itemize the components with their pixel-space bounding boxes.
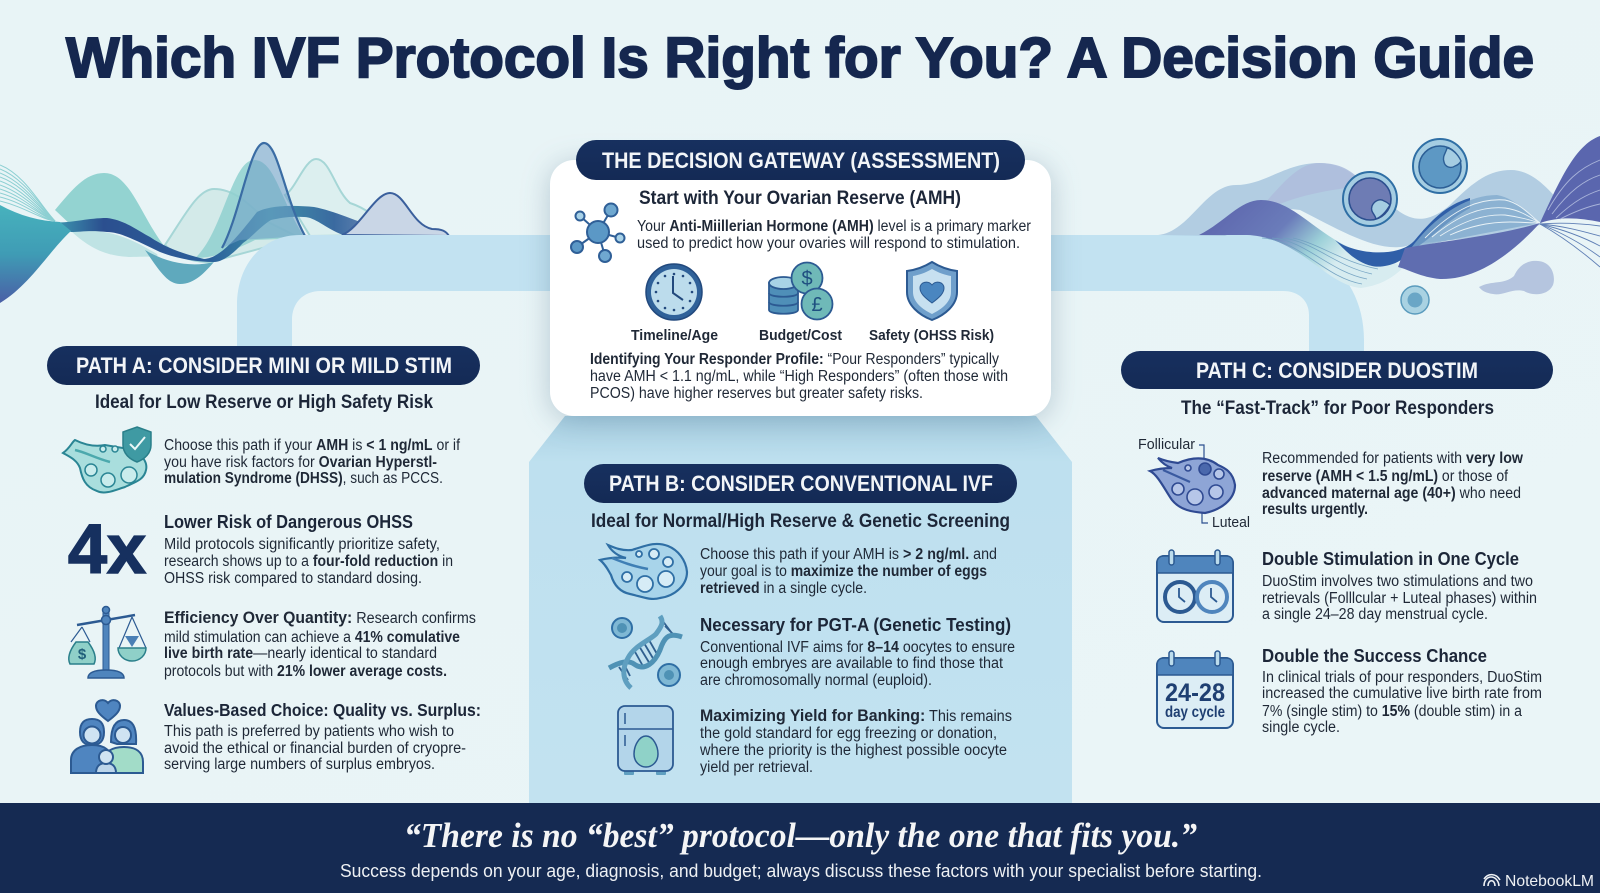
icon: ovary with phase labels [1138,437,1250,531]
heading pill: path C [1121,351,1553,389]
text: lower risk: OHSS risk compared to standard dosing. [164,570,422,587]
text: responder profile: PCOS) have higher reserves but greater safety risks. [590,385,923,402]
connector pipes from gateway [237,235,1364,352]
text: AMH marker: Your Anti-Miillerian Hormone (AMH) level is a primary marker [637,218,1031,235]
heading pill: path B: PATH B: CONSIDER CONVENTIONAL IVF [609,471,993,496]
left decorative hormone waves [0,143,449,303]
icon: family [71,700,143,773]
text: AMH marker: used to predict how your ovaries will respond to stimulation. [637,235,1020,252]
subheading: path B: Ideal for Normal/High Reserve & Genetic Screening [591,510,1010,532]
text: values-based: avoid the ethical or financial burden of cryopre- [164,740,466,757]
panel: path B content [584,464,1017,776]
icon: balance scale: $ [78,646,87,663]
icon: molecule [571,204,624,262]
icon: calendar 24-28 day cycle: 24-28 [1165,679,1225,707]
icon: balance scale [69,606,146,678]
text: AMH marker [637,218,1031,252]
factor labels: Safety (OHSS Risk) [869,327,994,344]
icon: ovary [600,544,687,599]
icon: egg freezer [618,706,673,775]
heading pill: path B [584,464,1017,503]
text: choose path B: Choose this path if your AMH is > 2 ng/ml. and [700,546,997,563]
text: success chance: In clinical trials of pour responders, DuoStim [1262,669,1542,686]
heading pill: path A [47,346,480,385]
text: recommended: Recommended for patients with very low [1262,450,1524,467]
text: PGT-A: enough embryes are available to find those that [700,655,1004,672]
text: PGT-A: are chromosomally normal (euploid). [700,672,932,689]
text: double stimulation: retrievals (Folllcular + Luteal phases) within [1262,590,1537,607]
title: Which IVF Protocol Is Right for You? A Decision Guide [66,26,1534,90]
text: banking: yield per retrieval. [700,759,813,776]
right decorative waves and cells [1158,136,1600,314]
text: banking: the gold standard for egg freezing or donation, [700,725,997,742]
text: responder profile [590,351,1008,402]
text: lower risk: Mild protocols significantly prioritize safety, [164,536,440,553]
text: lower risk: research shows up to a four-fold reduction in [164,553,453,570]
factor labels: Timeline/Age [631,327,718,344]
text: PGT-A [700,614,1015,689]
text: success chance: single cycle. [1262,719,1340,736]
text: PGT-A: Necessary for PGT-A (Genetic Testing) [700,614,1011,635]
text: double stimulation [1262,548,1537,623]
panel: path A [47,346,481,773]
text: choose path B: your goal is to maximize the number of eggs [700,563,987,580]
icon: small oocyte [1401,286,1429,314]
text: efficiency: live birth rate—nearly identical to standard [164,645,437,662]
text: recommended: reserve (AMH < 1.5 ng/mL) or those of [1262,468,1509,485]
text: lower risk [164,511,453,587]
factor labels [631,327,994,344]
text: banking: Maximizing Yield for Banking: This remains [700,706,1012,725]
text: efficiency: mild stimulation can achieve a 41% comulative [164,629,460,646]
icon: DNA and cells [609,616,682,688]
icon: coins: $ [801,268,813,290]
text: efficiency [164,608,476,680]
panel: path C [1121,351,1553,736]
text: responder profile: have AMH < 1.1 ng/mL, while “High Responders” (often those with [590,368,1008,385]
text: PGT-A: Conventional IVF aims for 8–14 oocytes to ensure [700,639,1015,656]
text: choose path B: retrieved in a single cycle. [700,580,867,597]
icon: coins [769,262,832,320]
heading: ovarian reserve: Start with Your Ovarian Reserve (AMH) [639,187,961,209]
text: efficiency: protocols but with 21% lower average costs. [164,663,447,680]
heading pill: path C: PATH C: CONSIDER DUOSTIM [1196,358,1478,383]
footer quote: “There is no “best” protocol—only the one that fits you.” [404,816,1197,855]
icon: egg cell upper [1413,139,1467,193]
text: values-based: serving large numbers of surplus embryos. [164,756,435,773]
footer subtext: Success depends on your age, diagnosis, and budget; always discuss these factors with your specialist before starting. [340,860,1262,881]
icon: ovary with shield [63,427,151,492]
text: values-based: Values-Based Choice: Quality vs. Surplus: [164,700,481,720]
text: choose path A: mulation Syndrome (DHSS), such as PCCS. [164,470,443,487]
text: recommended: results urgently. [1262,501,1368,518]
panel: decision gateway [550,140,1051,416]
text: choose path A: you have risk factors for Ovarian Hyperstl- [164,454,437,471]
heading pill: gateway: THE DECISION GATEWAY (ASSESSMENT) [602,148,1000,173]
icon: calendar 24-28 day cycle [1157,651,1233,728]
icon: egg cell lower [1343,172,1397,226]
factor labels: Budget/Cost [759,327,842,344]
icon: calendar infinity clocks [1157,550,1233,622]
text: double stimulation: a single 24–28 day menstrual cycle. [1262,606,1488,623]
text: banking: where the priority is the highest possible oocyte [699,742,1007,759]
text: choose path A: Choose this path if your AMH is < 1 ng/mL or if [164,437,461,454]
text: double stimulation: Double Stimulation in One Cycle [1262,548,1519,569]
text: success chance [1262,645,1542,736]
text: success chance: 7% (single stim) to 15% (double stim) in a [1262,703,1522,720]
icon: ovary with phase labels: Follicular [1138,437,1195,453]
heading pill: path A: PATH A: CONSIDER MINI OR MILD STIM [76,353,452,378]
text: efficiency: Efficiency Over Quantity: Research confirms [164,608,476,627]
icon: safety shield [907,262,957,320]
text: responder profile: Identifying Your Responder Profile: “Pour Responders” typically [590,351,999,368]
text: values-based: This path is preferred by patients who wish to [164,723,454,740]
text: success chance: Double the Success Chance [1262,645,1487,666]
NotebookLM mark: NotebookLM [1505,873,1594,890]
text: lower risk: Lower Risk of Dangerous OHSS [164,511,413,532]
subheading: path C: The “Fast-Track” for Poor Responders [1181,397,1494,419]
text: choose path B [700,546,997,597]
text: banking [699,706,1012,776]
heading pill: gateway [576,140,1025,180]
text: values-based [164,700,481,773]
subheading: path A: Ideal for Low Reserve or High Safety Risk [95,391,433,413]
icon: ovary with phase labels: Luteal [1212,515,1250,531]
text: choose path A [164,437,461,487]
text: double stimulation: DuoStim involves two stimulations and two [1262,573,1533,590]
icon: clock [646,264,702,320]
text: success chance: increased the cumulative live birth rate from [1262,685,1542,702]
text: recommended [1262,450,1524,518]
panel: path B background [529,416,1072,803]
stat: 4x: 4x [68,510,146,588]
icon: calendar 24-28 day cycle: day cycle [1165,704,1225,721]
icon: sperm shape [1479,261,1554,294]
text: recommended: advanced maternal age (40+) who need [1262,485,1521,502]
icon: coins: £ [811,294,823,316]
footer banner [0,803,1600,893]
